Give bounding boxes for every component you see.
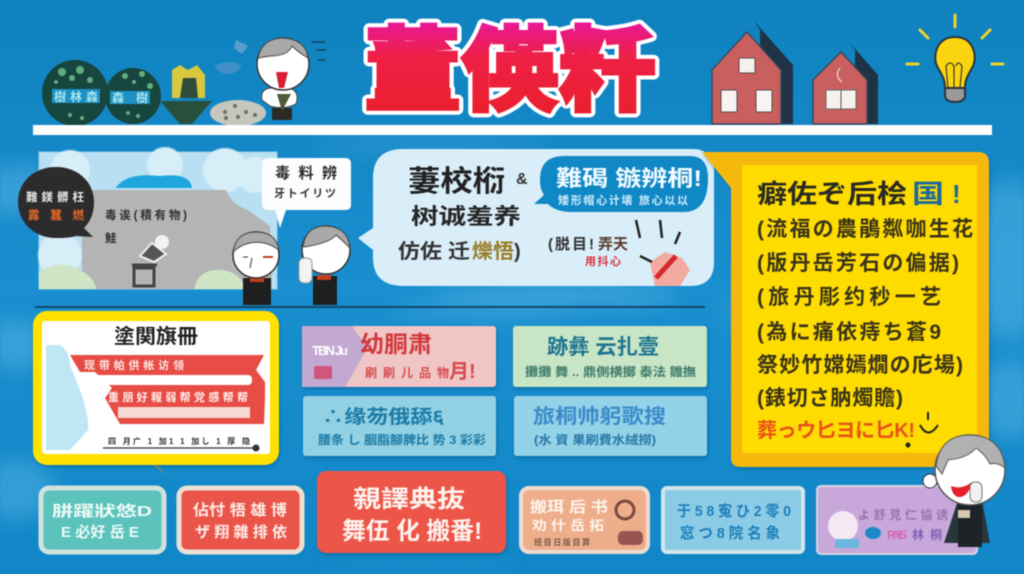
icon: bin [132,235,169,286]
panel: light blue box right [514,396,707,456]
panel: main speech bubble [358,149,714,286]
gray land shape [82,190,272,289]
panel: pink box: 刷刷儿品物 [365,365,449,380]
panel: light blue box left [303,396,496,456]
callout: white speech bubble: 牙トイリツ [274,187,336,200]
panel: main speech bubble: 用抖心 [585,254,621,268]
card: purple: PAIS [887,528,907,542]
panel: main speech bubble: 爍悟 [472,240,514,263]
panel: light blue box left: ∴缘芴俄舔६ [322,406,444,428]
panel: pink box: 月! [449,361,476,383]
panel: main speech bubble: 萋校椼 [408,165,505,198]
character: right person [299,226,350,305]
panel: main speech bubble: 弄天 [598,236,628,253]
red ribbons: 现带帕供帐访领 [84,358,184,372]
panel: yellow notes: 葬っウ匕ヨに匕K! [757,419,915,442]
divider line [35,306,705,308]
character: bottom right person [923,435,1005,547]
card: peach: 搬珥 后 书 [530,498,608,516]
panel: yellow notes: 国 [912,179,944,209]
panel: yellow notes: ! [952,179,961,209]
card: blue: 窓 つ 8 院 名 象 [680,524,780,542]
icon: large house [712,21,793,124]
panel: map scene: 鮭 [105,231,117,245]
panel: yellow notes: (版丹岳芳石の偏据) [757,252,959,275]
blue inner bubble: 難碣 镞辨桐! [556,166,702,191]
callout: dark bubble: 難鎂髒枉 [26,190,84,204]
button: big red call to action: 親譯典抜 [353,486,465,513]
panel: green box: 攤攤 舞 .. 鼎側横擲 泰法 雛撫 [525,364,696,379]
card: blue: 于 5 8 寃 ひ 2 零 0 [677,502,791,520]
panel: green box: 跡彝 云扎壹 [547,336,659,359]
blue inner bubble: 矮形帽心计壊 旅心以以 [558,193,688,207]
card: peach: 班目日版目算 [534,537,590,547]
shelf bar [33,125,992,135]
panel: yellow bordered ribbon card: 四 月广 1 加1 1 加し 1 厚 隐 [108,436,250,446]
panel: yellow notes: (錶切さ肭燭贍) [757,387,903,410]
callout: white speech bubble: 毒料辨 [275,164,337,182]
card: purple: よ 舒 見 仁 協 诱 [858,507,948,522]
button: teal [41,488,164,552]
panel: map scene [38,147,277,289]
button: red [179,488,302,552]
panel: light blue box right: 旅桐帅躬歌搜 [533,405,666,428]
panel: yellow bordered ribbon card: 塗関旗冊 [114,324,198,348]
card: peach [521,488,648,552]
card: purple [817,486,977,554]
icon: hand and burst [636,220,690,286]
icon: small house [813,42,878,124]
button: red: 佔忖 牾 雄 博 [193,501,287,519]
button: red: ザ 翔 雜 排 依 [195,523,287,541]
callout: white speech bubble [262,158,351,228]
header illustration: trees and rock [42,40,266,126]
map label: 毒诶(積有物) [105,208,187,222]
panel: pink box [302,326,496,387]
red ribbons: 重朋好報弱帮党感帮帮 [108,390,248,404]
green bushes [39,264,246,289]
panel: yellow notes [702,152,989,467]
header illustration: trees and rock: 森樹 [112,90,148,105]
panel: main speech bubble: (脱目! [548,235,594,253]
card: peach: 劝 什 岳 拓 [532,518,604,533]
panel: yellow notes: 祭妙竹嫦嫣燗の庀場) [757,354,963,377]
panel: main speech bubble: ) [514,241,521,263]
character: top shouting person [257,38,326,120]
button: teal: 肼躍狀悠D [52,502,152,520]
panel: yellow notes: (旅丹彫约秒一艺 [757,286,941,309]
panel: pink box: 幼胴肃 [360,331,432,357]
card: blue [663,488,803,552]
panel: light blue box right: (水 資 果刷費水絨撈) [534,432,656,447]
header illustration: trees and rock: 樹林森 [54,89,98,104]
panel: main speech bubble: 树诚羞养 [411,204,521,229]
button: teal: E 必好 岳 E [61,523,139,541]
red ribbons [70,355,265,424]
panel: pink box: TBN Ju [312,343,348,358]
panel: yellow notes: (為に痛依痔ち蒼9 [757,320,941,344]
button: big red call to action: 舞伍 化 搬番! [342,518,482,545]
panel: green box [513,326,707,387]
icon: light bulb [907,15,1003,102]
panel: main speech bubble: & [516,171,528,188]
title: 董偀粁 [364,21,656,123]
character: left person [233,232,279,305]
button: big red call to action [317,471,506,553]
panel: main speech bubble: 仿佐 迁 [398,240,470,263]
panel: yellow notes: 癖佐ぞ后桧 [757,179,907,209]
card: purple: 林桐 [912,527,942,542]
panel: yellow bordered ribbon card [33,311,279,475]
panel: yellow notes: (流福の農鵑粼咖生花 [757,218,973,241]
callout: dark bubble [18,167,94,238]
callout: dark bubble: 露蠶燃 [28,208,84,222]
blue inner bubble [534,156,708,212]
title: 董偀粁 [364,21,656,123]
panel: light blue box left: 腰条 し 胭脂腳脾比 势 3 彩彩 [318,432,486,447]
